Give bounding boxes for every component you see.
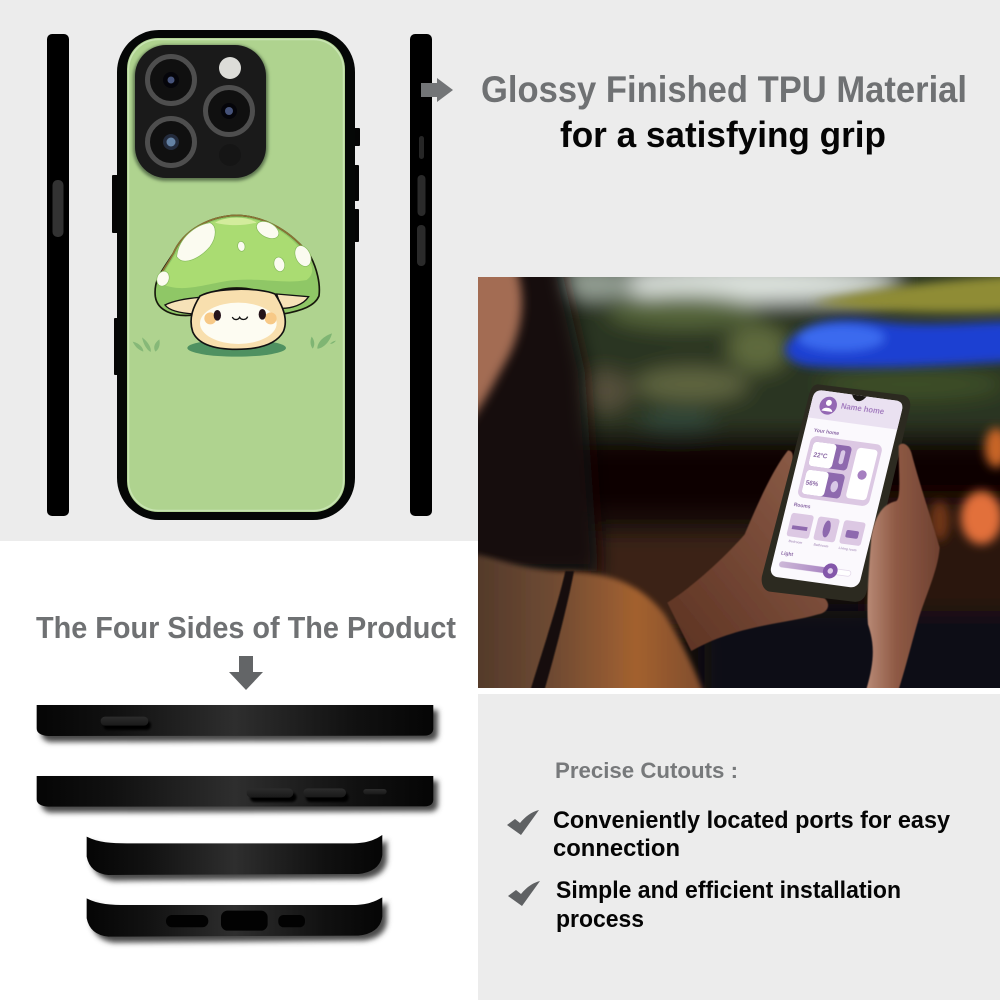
blurred background scenery — [545, 238, 1000, 724]
sensor — [219, 144, 241, 166]
rooms label: Rooms — [793, 502, 811, 510]
grass left — [133, 337, 160, 352]
ground shadow — [187, 339, 286, 357]
bokeh lights — [930, 428, 1000, 544]
face white area — [200, 303, 277, 344]
lens top left — [148, 56, 194, 104]
camera module — [133, 45, 268, 181]
case side buttons — [112, 128, 360, 375]
case body — [117, 30, 355, 520]
panel: white strip under photo — [478, 688, 1000, 694]
case green back — [127, 38, 345, 512]
cap spots — [155, 218, 314, 288]
phone case left side view — [47, 34, 69, 516]
arrow: pointing down to side strips — [229, 656, 263, 690]
lens right — [206, 88, 252, 134]
mushroom face — [191, 289, 285, 349]
right hand — [866, 444, 940, 689]
strip 4: bottom edge with port cutouts — [87, 897, 387, 943]
right ear — [277, 294, 309, 308]
lens bottom left — [148, 118, 194, 166]
dress strap — [531, 571, 574, 689]
flash — [219, 57, 241, 79]
panel: grey background top — [0, 0, 1000, 541]
screen notch — [851, 395, 866, 402]
strip 3: plain curved edge — [87, 835, 387, 881]
bullet 1 — [553, 807, 950, 862]
climate card: 22°C — [812, 451, 829, 461]
side strips — [37, 705, 438, 943]
room tiles — [786, 513, 866, 546]
name home label: Name home — [840, 401, 886, 416]
bullet 2: Simple and efficient installation — [556, 877, 901, 904]
avatar — [818, 396, 839, 416]
room labels — [788, 539, 857, 552]
room labels: Living room — [838, 546, 857, 552]
phone body — [762, 384, 910, 602]
panel: grey background bottom right — [478, 694, 1000, 1000]
shoulder — [468, 553, 708, 704]
cap brown outline — [160, 215, 311, 277]
room labels: Bedroom — [788, 539, 803, 545]
mouth — [232, 317, 248, 320]
light label: Light — [780, 550, 794, 558]
strip 1: top edge — [37, 705, 438, 742]
mushroom cap — [155, 215, 319, 316]
phone screen — [769, 389, 904, 588]
bullet 2 — [556, 877, 901, 933]
heading — [481, 69, 967, 155]
strip 2: side with buttons — [37, 776, 438, 813]
climate card — [797, 435, 883, 507]
light slider — [778, 556, 853, 581]
bullet 1: Conveniently located ports for easy — [553, 807, 950, 834]
panel: white background bottom left — [0, 541, 478, 1000]
photo: woman holding smartphone — [478, 277, 1000, 688]
check icon 2 — [508, 881, 540, 906]
section heading: Precise Cutouts : — [555, 758, 738, 783]
arrow: pointing right to heading — [421, 78, 453, 102]
mushroom illustration — [133, 215, 336, 357]
heading line: black: for a satisfying grip — [560, 114, 886, 155]
bullet 2: process — [556, 906, 644, 933]
grass right — [311, 333, 336, 349]
phone case back view — [112, 30, 360, 520]
heading line: grey: Glossy Finished TPU Material — [481, 69, 967, 110]
your home label: Your home — [813, 428, 840, 437]
cap highlight — [215, 218, 257, 225]
phone case right side view — [410, 34, 432, 516]
eyes — [214, 309, 266, 321]
check icon 1 — [507, 810, 539, 835]
cheeks — [204, 312, 277, 324]
cap lighter dome — [161, 217, 312, 288]
bullet 1: connection — [553, 835, 680, 862]
left hand — [667, 450, 828, 651]
room labels: Bathroom — [813, 542, 829, 549]
neck — [465, 264, 522, 428]
screen header — [808, 389, 904, 430]
sub-heading: four sides: The Four Sides of The Product — [36, 610, 456, 645]
blue river and hill — [785, 274, 1000, 368]
precise cutouts section — [507, 758, 950, 933]
climate card: 56% — [805, 480, 819, 488]
left ear — [165, 297, 200, 314]
room tile icons — [791, 516, 861, 542]
hair — [458, 254, 598, 571]
